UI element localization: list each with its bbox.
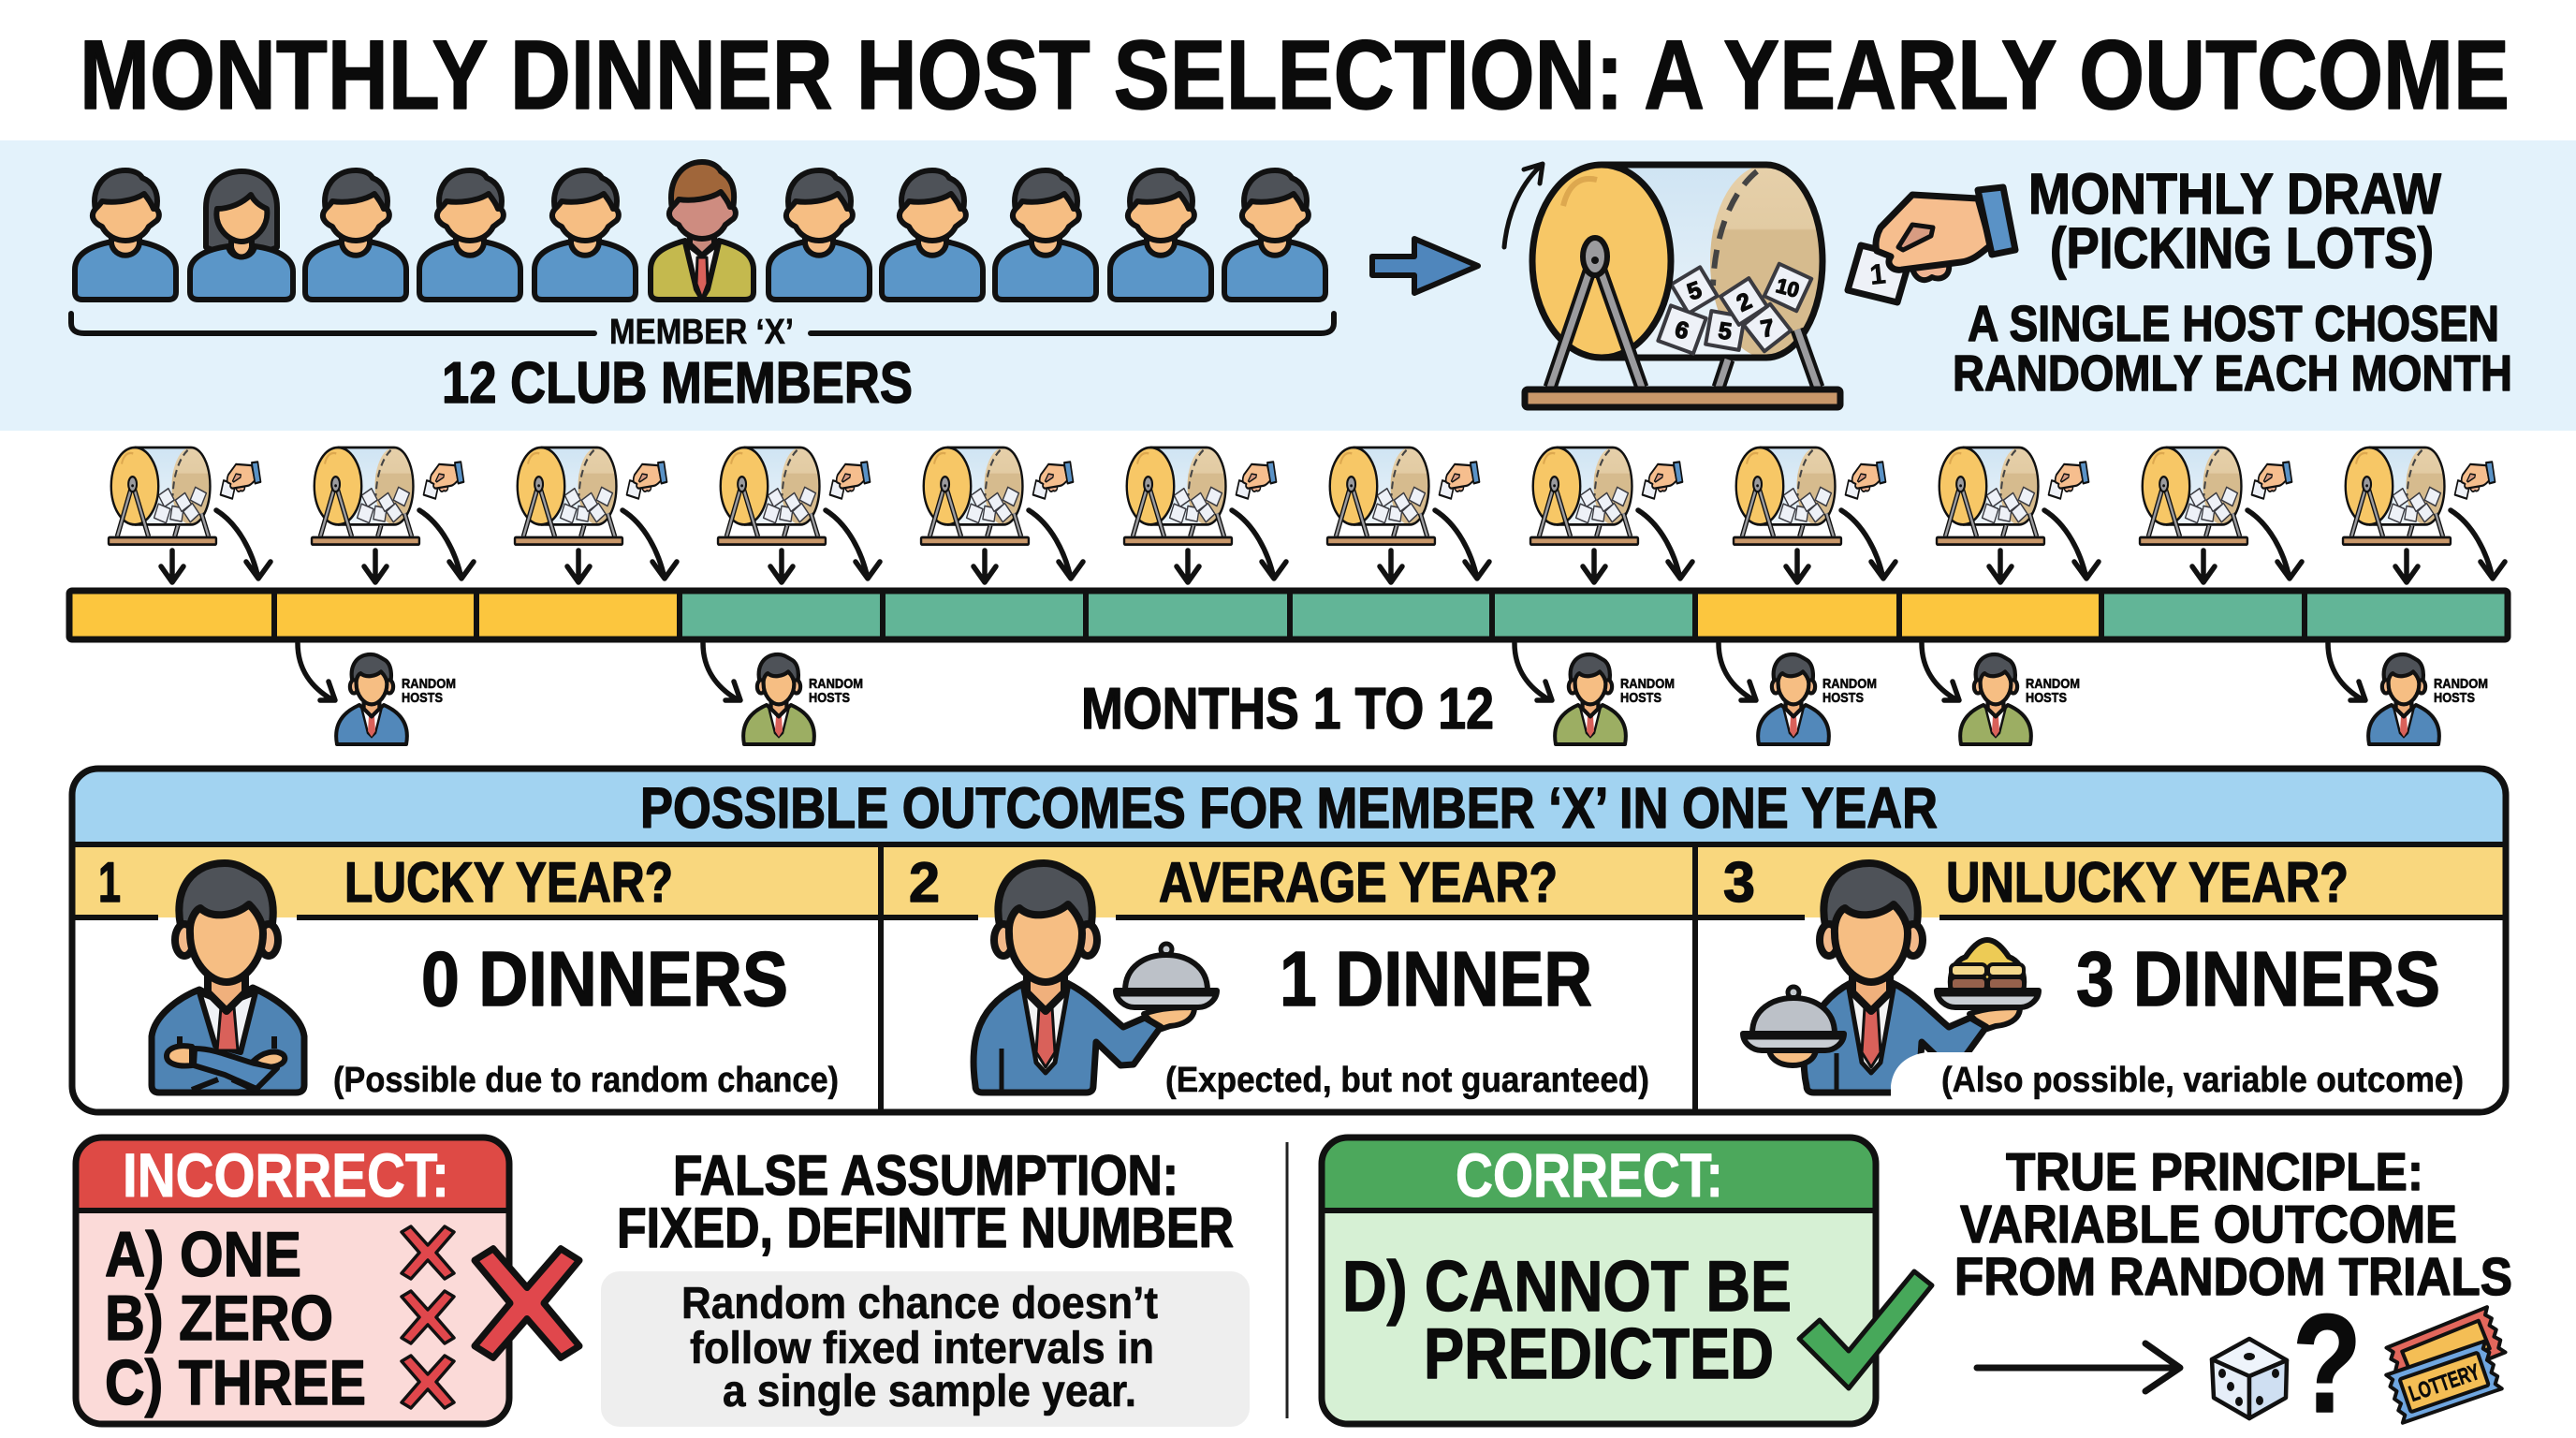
random host 6: RANDOM [2434, 676, 2488, 692]
outcome 3: unlucky year: 3 DINNERS [2076, 935, 2440, 1022]
member X label: MEMBER ‘X’ [609, 313, 794, 352]
panel: incorrect answers [76, 1137, 579, 1424]
false assumption heading: FIXED, DEFINITE NUMBER [617, 1196, 1234, 1259]
icon: person with two plates [1743, 863, 2039, 1093]
random host 5: RANDOM [2026, 676, 2080, 692]
arrow to drum [1372, 239, 1478, 293]
false assumption heading: FALSE ASSUMPTION: [673, 1144, 1178, 1207]
twelve month timeline bar [69, 591, 2508, 639]
outcome 1: lucky year [98, 851, 839, 1100]
icon: lottery tickets [2386, 1307, 2506, 1423]
outcome 2: average year: 2 [909, 851, 940, 914]
answer C: C) THREE [105, 1347, 366, 1418]
outcome 3: unlucky year: UNLUCKY YEAR? [1946, 851, 2349, 914]
icon: female member [190, 171, 293, 300]
monthly draw heading: (PICKING LOTS) [2050, 216, 2434, 280]
outcome 2: average year: AVERAGE YEAR? [1159, 851, 1558, 914]
icon: hand picking lot: 1 [1868, 258, 1887, 291]
white caption backing [1891, 1052, 1994, 1108]
arrow to random symbols [1977, 1343, 2180, 1391]
false assumption heading [617, 1144, 1234, 1259]
icon: lottery drum: 10 [1774, 273, 1802, 302]
panel: possible outcomes [69, 766, 2509, 1112]
random host 3: HOSTS [1620, 690, 1661, 706]
panel: club members and draw band [0, 140, 2576, 431]
icon: hand picking lot [1848, 187, 2015, 302]
icon: check mark [1799, 1271, 1932, 1388]
random host 3: RANDOM [1620, 676, 1675, 692]
icon: lottery drum: 2 [1733, 287, 1756, 317]
single host text: A SINGLE HOST CHOSEN [1968, 296, 2499, 352]
outcome 1: lucky year: 1 [98, 851, 121, 914]
monthly draw heading: MONTHLY DRAW [2028, 162, 2441, 226]
random host 5: HOSTS [2026, 690, 2067, 706]
question mark: ? [2292, 1284, 2362, 1438]
answer D: D) CANNOT BE [1342, 1247, 1792, 1327]
icon: person with crossed arms [152, 863, 304, 1093]
random host 5 [1922, 643, 2080, 744]
icon: die [2212, 1339, 2287, 1418]
outcome 1: lucky year: (Possible due to random chance) [333, 1061, 839, 1100]
monthly draw heading [2028, 162, 2441, 280]
true principle heading: FROM RANDOM TRIALS [1954, 1247, 2512, 1307]
icon: large cross [475, 1249, 579, 1357]
answer B: B) ZERO [105, 1283, 333, 1354]
icon: lottery drum: 5 [1684, 276, 1705, 305]
icon: lottery drum: 6 [1672, 316, 1691, 345]
random host 3 [1515, 643, 1675, 744]
icon: lottery drum: 5 [1717, 317, 1734, 345]
member count: 12 CLUB MEMBERS [442, 351, 913, 416]
incorrect heading: INCORRECT: [123, 1140, 449, 1210]
outcome 2: average year: 1 DINNER [1280, 935, 1592, 1022]
random host 6 [2328, 643, 2488, 744]
outcome 3: unlucky year: 3 [1723, 851, 1755, 914]
random host 1 [298, 643, 456, 744]
outcome 2: average year [909, 851, 1649, 1100]
outcome 2: average year: (Expected, but not guaranteed) [1165, 1061, 1649, 1100]
icon: lottery tickets: LOTTERY [2406, 1359, 2483, 1407]
icon: plate of food [1937, 940, 2039, 1007]
random host 6: HOSTS [2434, 690, 2475, 706]
outcome 3: unlucky year: (Also possible, variable outcome) [1941, 1061, 2464, 1100]
explanation box: Random chance doesn’t [681, 1279, 1158, 1328]
random host 1: RANDOM [402, 676, 456, 692]
true principle heading: VARIABLE OUTCOME [1960, 1195, 2457, 1255]
explanation box: a single sample year. [723, 1367, 1136, 1416]
single host text [1953, 296, 2512, 402]
icon: member X [651, 162, 754, 300]
timeline draws for months 1 to 12 [109, 448, 2505, 582]
explanation box [601, 1271, 1250, 1427]
outcome 1: lucky year: LUCKY YEAR? [344, 851, 673, 914]
random host 2 [703, 643, 863, 744]
random host 4: HOSTS [1822, 690, 1864, 706]
random host 2: RANDOM [809, 676, 863, 692]
random host 4 [1719, 643, 1877, 744]
bracket under members [71, 314, 1334, 333]
random host 2: HOSTS [809, 690, 850, 706]
outcome 1: lucky year: 0 DINNERS [421, 935, 788, 1022]
panel: correct answer [1322, 1137, 1932, 1424]
true principle heading [1954, 1142, 2512, 1307]
explanation box: follow fixed intervals in [690, 1324, 1154, 1373]
random host 1: HOSTS [402, 690, 443, 706]
panel: correct answer: PREDICTED [1424, 1314, 1774, 1394]
outcome 3: unlucky year [1723, 851, 2464, 1108]
icon: person with cloche [973, 863, 1217, 1093]
icon: lottery drum [1504, 164, 1840, 407]
random host 4: RANDOM [1822, 676, 1877, 692]
icon: lottery drum: 7 [1759, 315, 1776, 343]
club member row [75, 162, 1325, 300]
true principle heading: TRUE PRINCIPLE: [2006, 1142, 2423, 1202]
correct heading: CORRECT: [1456, 1140, 1723, 1210]
outcomes heading: POSSIBLE OUTCOMES FOR MEMBER ‘X’ IN ONE YEAR [640, 776, 1938, 840]
months label: MONTHS 1 TO 12 [1081, 677, 1494, 741]
icon: small crosses [402, 1226, 454, 1408]
answer A: A) ONE [105, 1219, 301, 1290]
